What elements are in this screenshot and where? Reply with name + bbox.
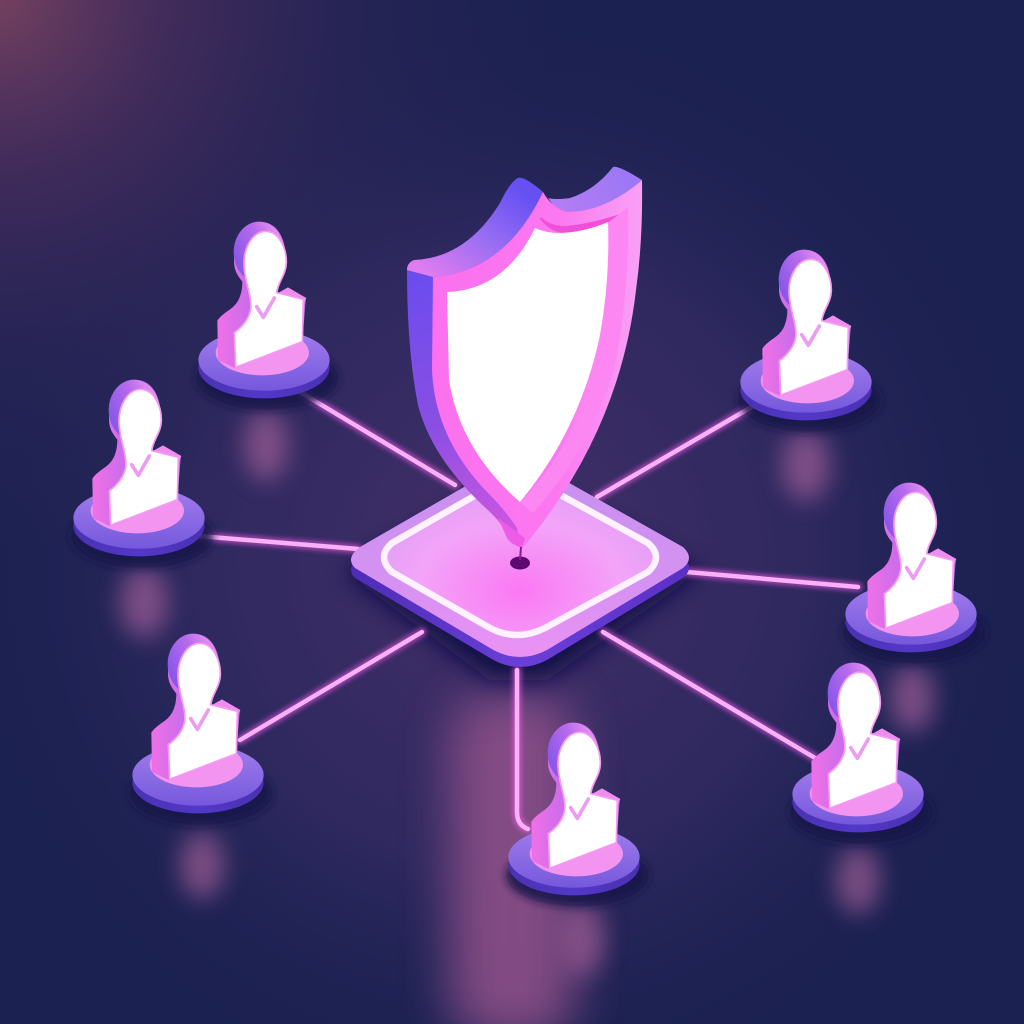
platform shadow xyxy=(345,492,700,680)
shield side xyxy=(407,178,543,547)
platform inner glow xyxy=(384,480,656,635)
person left xyxy=(71,380,214,568)
connector lines xyxy=(198,392,858,829)
person top left xyxy=(196,222,339,410)
central platform xyxy=(351,464,689,667)
platform top xyxy=(351,464,689,657)
shield tip thread xyxy=(520,547,521,560)
shield white panel xyxy=(447,222,608,502)
shield xyxy=(407,167,642,560)
shield tip xyxy=(498,518,525,548)
line core xyxy=(198,392,858,829)
shield floor reflection xyxy=(450,695,575,1024)
shield top right bevel xyxy=(548,167,642,215)
shield top left bevel xyxy=(407,178,543,277)
person lower left xyxy=(130,634,273,825)
person lower right xyxy=(790,663,933,844)
shield inner bevel xyxy=(520,207,628,513)
glow xyxy=(198,392,858,829)
person bottom xyxy=(506,723,649,907)
shield front face xyxy=(432,180,642,548)
platform side xyxy=(351,474,689,667)
floor reflections xyxy=(120,409,934,976)
platform ring xyxy=(384,480,656,635)
shield notch shade xyxy=(540,214,620,233)
person right xyxy=(843,483,986,664)
anchor dot xyxy=(510,556,530,570)
person top right xyxy=(738,250,881,432)
